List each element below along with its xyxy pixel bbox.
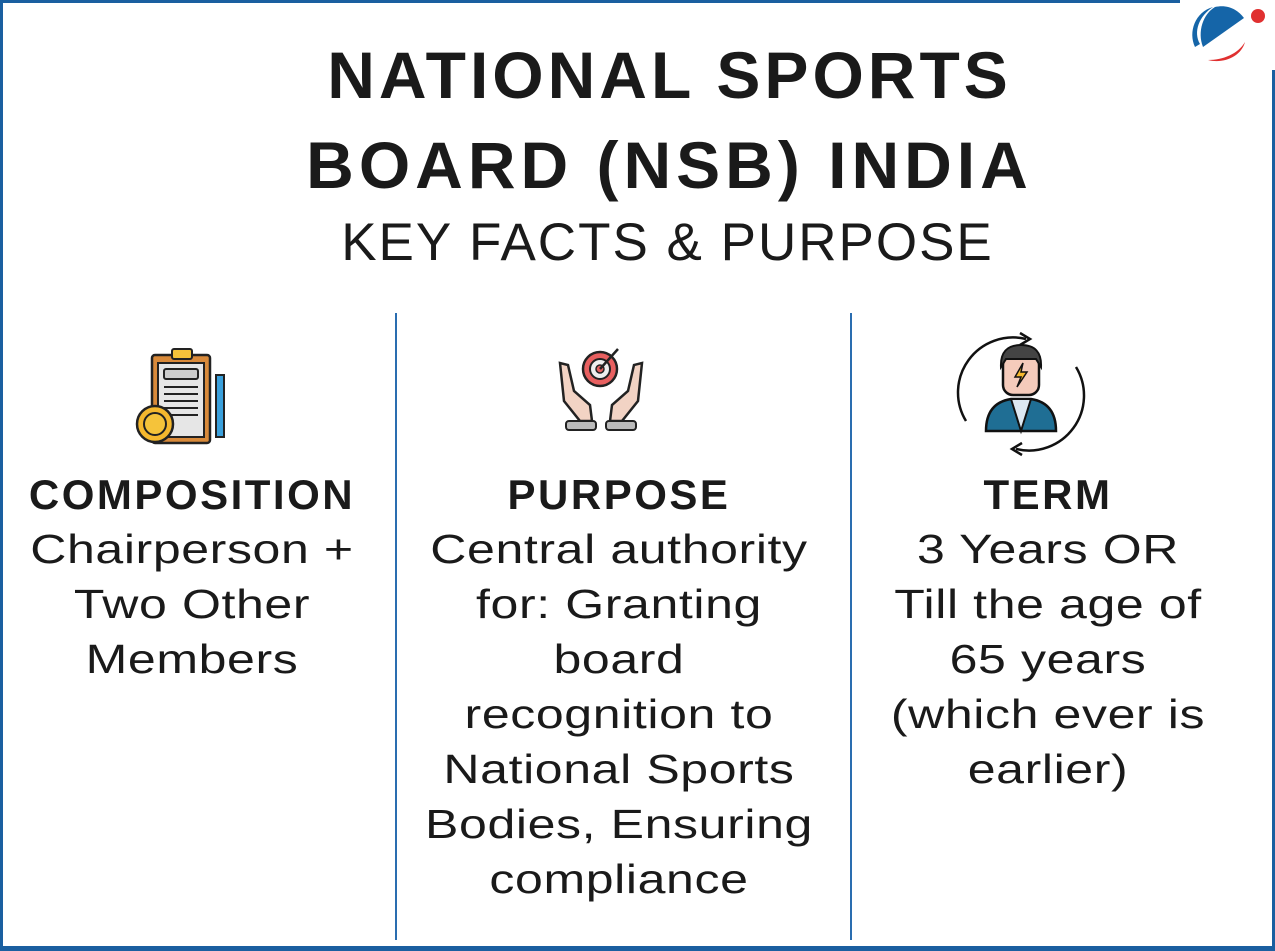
title: NATIONAL SPORTS [327,38,1012,112]
icon: hands target [558,348,644,431]
subtitle: KEY FACTS & PURPOSE [341,213,994,272]
title: BOARD (NSB) INDIA [306,128,1033,202]
column: purpose: Bodies, Ensuring [425,801,813,847]
logo [1192,6,1265,62]
column: term: 65 years [950,636,1146,682]
column: purpose: PURPOSE [508,471,730,518]
column: composition: COMPOSITION [29,471,355,518]
column: term: Till the age of [894,581,1202,627]
column: purpose: recognition to [465,691,773,737]
column: purpose: board [554,636,684,682]
icon: person cycle [956,332,1086,456]
column: purpose: National Sports [443,746,795,792]
column: composition [29,471,355,682]
column: purpose: for: Granting [476,581,762,627]
column: term: 3 Years OR [917,526,1179,572]
column: composition: Members [86,636,298,682]
column: purpose: Central authority [430,526,808,572]
icon: clipboard [136,348,225,444]
column: term: (which ever is [891,691,1205,737]
title [306,38,1033,202]
frame border [0,0,1180,3]
column: purpose [425,471,813,902]
column: term: earlier) [968,746,1128,792]
column: term: TERM [984,471,1112,518]
column: composition: Chairperson + [30,526,354,572]
column: purpose: compliance [489,856,749,902]
column: composition: Two Other [74,581,310,627]
column: term [891,471,1205,792]
